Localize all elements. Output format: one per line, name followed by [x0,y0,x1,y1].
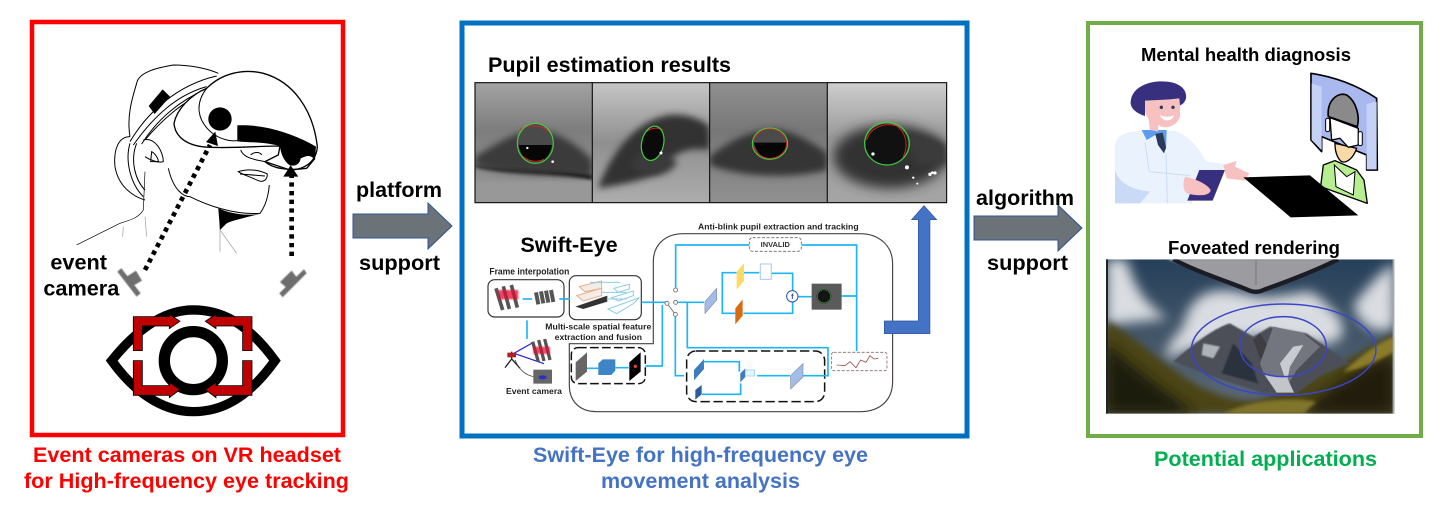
multi-scale block [569,276,641,320]
network layers [705,263,842,324]
arrow: platform support: platform [356,178,442,202]
foveation ellipses [1191,304,1376,395]
multi-scale label [545,321,652,342]
patient in headset booth [1311,73,1377,203]
arrow: algorithm support [974,186,1082,275]
photo 1 [475,83,592,203]
mountains [1173,323,1350,393]
INVALID box: INVALID [761,240,790,249]
illustration: doctor and VR patient [1115,73,1377,217]
headset edge [1167,259,1340,291]
frame interpolation block [488,266,569,317]
arrow: algorithm support: support [987,251,1068,275]
heading: mental health diagnosis: Mental health diagnosis [1141,44,1351,65]
label: event camera: event [50,250,107,274]
event camera sketch: Event camera [506,386,562,396]
clouds [1107,259,1394,360]
heading: foveated rendering: Foveated rendering [1168,237,1340,258]
dashed temporal block [687,351,825,402]
multi-scale label: extraction and fusion [555,332,642,342]
heading: pupil estimation results: Pupil estimation results [488,53,731,77]
frame interpolation block: Frame interpolation [489,266,569,276]
doctor [1115,81,1249,203]
arrow: platform support [353,178,452,275]
illustration: head wearing VR headset with event cameras [43,65,317,412]
photo 2 [592,83,710,203]
caption: event cameras [24,443,349,493]
photo 4 [827,83,947,203]
caption: event cameras: for High-frequency eye tracking [24,469,349,493]
caption: Swift-Eye: movement analysis [601,469,800,493]
label: event camera [43,250,119,300]
INVALID box [749,238,801,251]
container title: Anti-blink pupil extraction and tracking [698,222,859,232]
heading: Swift-Eye: Swift-Eye [520,232,618,257]
outer container [569,234,893,412]
icon: eye with pupil and red tracking arrows [112,310,275,412]
caption: Swift-Eye: Swift-Eye for high-frequency eye [533,443,868,467]
caption: potential applications: Potential applications [1154,447,1377,471]
pupil estimation photo strip [475,83,947,203]
arrow: platform support: support [359,251,440,275]
dotted arrows [145,132,298,270]
blue connectors [523,245,857,394]
panel: event cameras on VR headset [32,22,343,435]
table [1243,175,1358,217]
caption: Swift-Eye [533,443,868,493]
hills [1106,322,1394,414]
arrow: algorithm support: algorithm [976,186,1074,210]
Swift-Eye architecture diagram [488,206,937,412]
foveated rendering image [1106,259,1394,414]
panel: Swift-Eye [462,23,967,436]
event camera sketch [505,339,562,396]
caption: event cameras: Event cameras on VR headset [33,443,341,467]
photo 3 [710,83,827,203]
arrow: blue bent up arrow [884,206,937,334]
switch nodes [665,288,678,316]
dashed feature extraction block [571,348,645,384]
label: event camera: camera [43,276,119,300]
multi-scale label: Multi-scale spatial feature [545,321,652,331]
panel: potential applications [1088,23,1421,436]
icon: event cameras [117,268,307,297]
pupil trace box [832,352,887,371]
eye tracker dot [208,107,232,131]
network layers: f [791,292,794,301]
